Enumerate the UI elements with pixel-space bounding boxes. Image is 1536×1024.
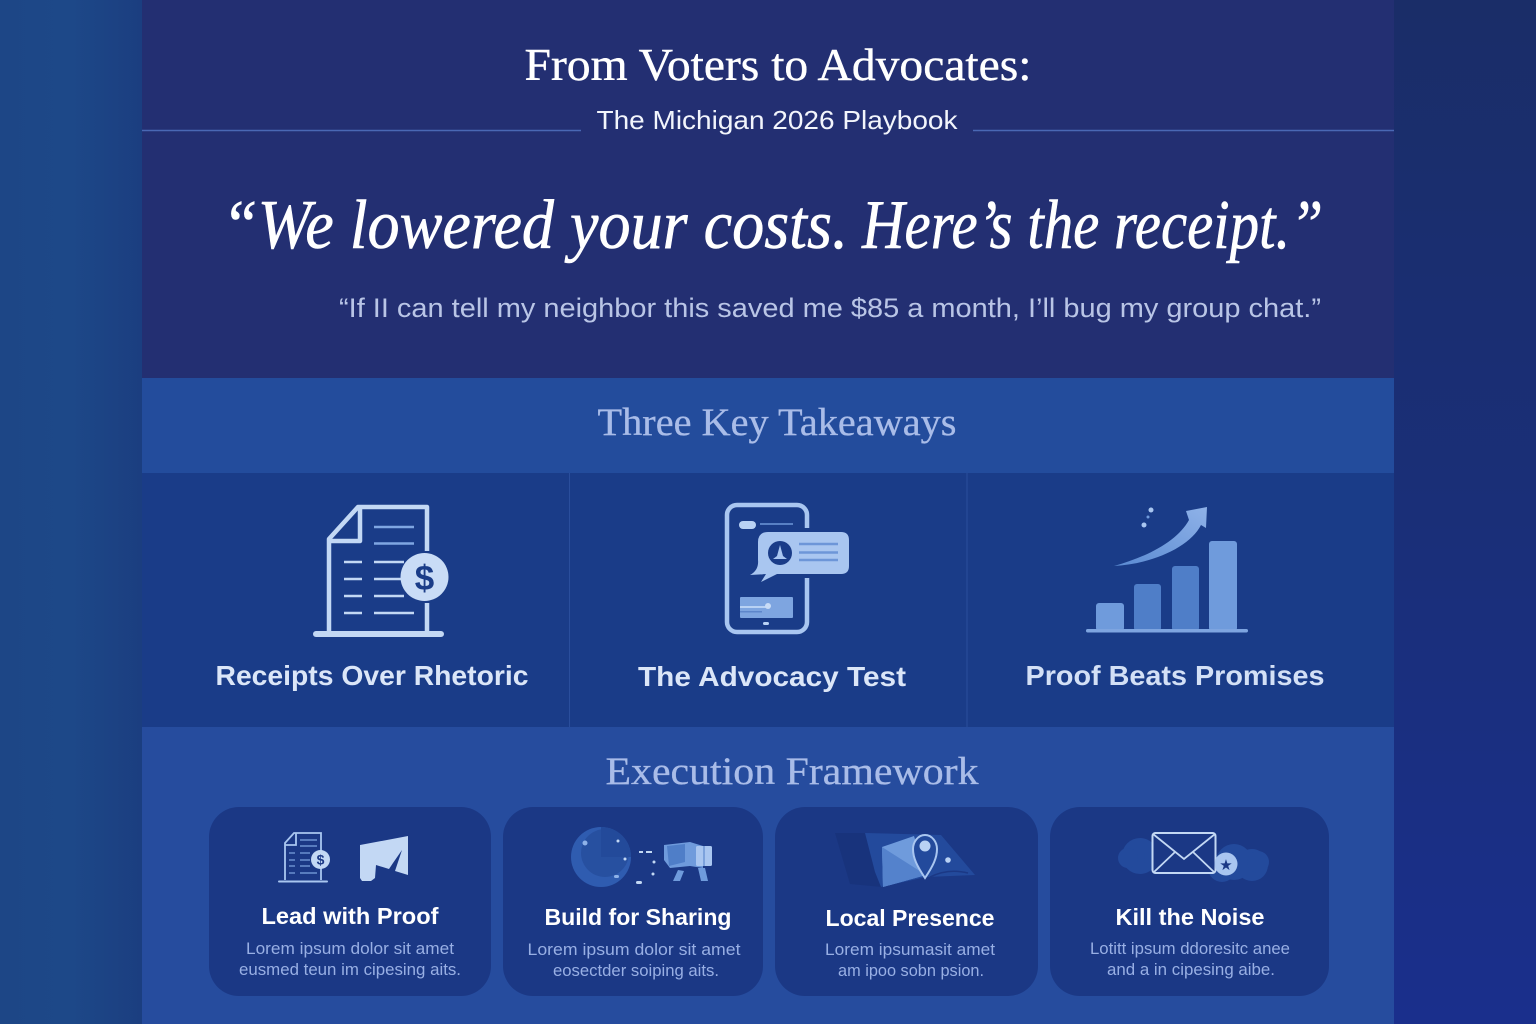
body text: Lorem ipsumasit amet bbox=[825, 941, 995, 959]
supporting quote: “If II can tell my neighbor this saved me $85 a month, I’ll bug my group chat.” bbox=[339, 293, 1321, 323]
body text: am ipoo sobn psion. bbox=[838, 962, 984, 980]
body text bbox=[1090, 940, 1290, 979]
label: proof beats promises: Proof Beats Promises bbox=[1026, 660, 1324, 691]
panel: three key takeaways heading band bbox=[142, 378, 1394, 473]
body text: Lorem ipsum dolor sit amet bbox=[246, 940, 454, 958]
panel: header bbox=[142, 0, 1394, 378]
body text: eosectder soiping aits. bbox=[553, 962, 719, 980]
background left band bbox=[0, 0, 142, 1024]
icon: receipt with dollar bbox=[313, 507, 448, 637]
icon: rising bar chart with arrow bbox=[1086, 507, 1248, 632]
body text bbox=[239, 940, 461, 979]
card: build for sharing bbox=[503, 807, 763, 996]
label: receipts over rhetoric: Receipts Over Rhetoric bbox=[216, 660, 528, 691]
heading: three key takeaways: Three Key Takeaways bbox=[598, 401, 956, 444]
body text: Lotitt ipsum ddoresitc anee bbox=[1090, 940, 1290, 958]
label: lead with proof: Lead with Proof bbox=[262, 903, 439, 929]
card: kill the noise bbox=[1050, 807, 1329, 996]
title: From Voters to Advocates: bbox=[524, 40, 1032, 90]
icon: mini receipt and flag: $ bbox=[317, 852, 325, 868]
panel: execution framework bbox=[142, 727, 1394, 1024]
icon: envelope with clouds and badge: ★ bbox=[1219, 857, 1233, 874]
label: the advocacy test: The Advocacy Test bbox=[638, 661, 906, 692]
icon: map with pin bbox=[835, 833, 975, 887]
icon: receipt with dollar: $ bbox=[415, 559, 434, 598]
label: local presence: Local Presence bbox=[826, 905, 994, 931]
heading: execution framework: Execution Framework bbox=[606, 750, 979, 793]
body text: Lorem ipsum dolor sit amet bbox=[528, 941, 741, 959]
body text: eusmed teun im cipesing aits. bbox=[239, 961, 461, 979]
card: local presence bbox=[775, 807, 1038, 996]
main quote bbox=[222, 187, 1323, 264]
body text bbox=[528, 941, 741, 980]
icon: mini receipt and flag bbox=[278, 833, 408, 882]
body text: and a in cipesing aibe. bbox=[1107, 961, 1275, 979]
icon: phone with chat bubble bbox=[727, 505, 849, 632]
label: build for sharing: Build for Sharing bbox=[544, 904, 732, 930]
main quote: “We lowered your costs. bbox=[222, 187, 848, 264]
background right band bbox=[1394, 0, 1536, 1024]
card: lead with proof bbox=[209, 807, 491, 996]
icon: clock and megaphone bbox=[571, 827, 712, 887]
icon: envelope with clouds and badge bbox=[1118, 833, 1269, 882]
main quote: Here’s the receipt.” bbox=[861, 187, 1323, 264]
body text bbox=[825, 941, 995, 980]
subtitle: The Michigan 2026 Playbook bbox=[596, 105, 959, 135]
label: kill the noise: Kill the Noise bbox=[1116, 904, 1264, 930]
panel: takeaway cards bbox=[142, 473, 1394, 727]
